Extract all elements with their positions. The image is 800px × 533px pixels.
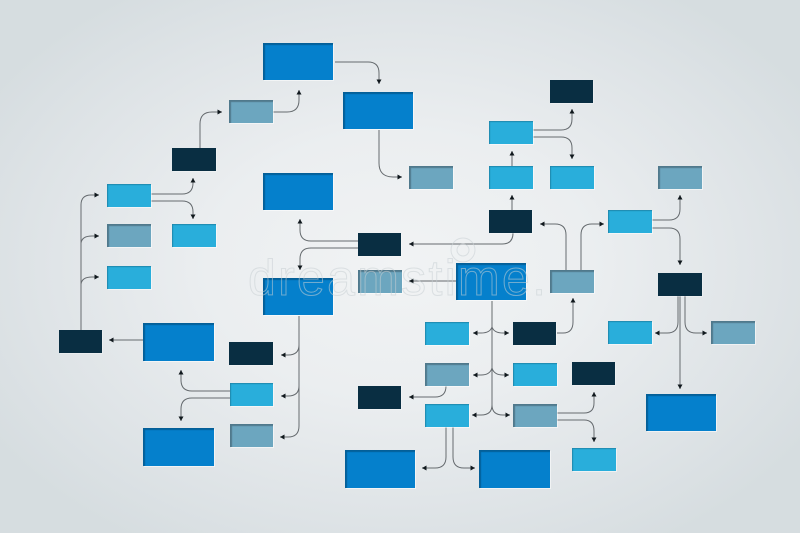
box: cyan mid right second xyxy=(550,166,594,189)
arrow: cyan box down to dark box xyxy=(652,228,680,265)
arrow: muted box down to cyan box xyxy=(557,420,594,442)
box: blue main xyxy=(456,263,526,300)
box: cyan third row left xyxy=(425,404,469,427)
box: muted second row left xyxy=(425,363,469,386)
arrow: muted box up to dark box xyxy=(557,392,594,413)
arrow: muted box to cyan box xyxy=(581,224,604,270)
box: dark first row right xyxy=(513,322,556,345)
arrow: dark box to cyan box xyxy=(655,296,678,333)
box: dark mid right xyxy=(489,210,532,233)
box: blue centre xyxy=(263,278,333,315)
box: cyan second row right xyxy=(513,363,557,386)
arrow: cyan box down to cyan box right xyxy=(533,137,572,159)
box: cyan mid right xyxy=(489,166,533,189)
arrow: trunk to right third row xyxy=(492,405,510,415)
arrow: cyan box up to muted box xyxy=(652,195,680,220)
box: blue bottom right xyxy=(479,450,550,488)
box: muted right xyxy=(658,166,702,189)
arrow: muted box to dark box xyxy=(540,224,566,270)
arrow: trunk to dark box xyxy=(281,345,299,355)
box: muted left second xyxy=(107,224,151,247)
box: dark upper left xyxy=(172,148,216,171)
arrow: cyan box to lower left blue box xyxy=(422,427,446,468)
box: blue top xyxy=(263,43,333,80)
arrow: dark right box to dark centre box xyxy=(409,233,513,244)
arrow: dark centre box down to blue box xyxy=(300,248,358,270)
arrow: left trunk to second box xyxy=(81,236,99,243)
arrow: second box to muted box xyxy=(379,130,402,177)
box: muted beside main xyxy=(550,270,594,293)
box: dark far left xyxy=(59,330,102,353)
box: cyan left first xyxy=(107,184,151,207)
box: muted lower centre xyxy=(230,424,273,447)
arrow: trunk to left second row xyxy=(473,368,492,375)
box: blue upper centre xyxy=(263,173,333,210)
box: muted far right xyxy=(711,321,755,344)
box: cyan lower centre xyxy=(230,383,273,406)
arrow: blue box trunk to muted box xyxy=(280,316,299,437)
arrow: cyan box down to blue box xyxy=(181,398,230,421)
box: dark top right xyxy=(550,80,593,103)
arrow: dark box to muted box xyxy=(685,296,707,333)
arrow: cyan box up to cyan box xyxy=(511,151,513,166)
box: blue far right xyxy=(646,394,716,431)
box: cyan right xyxy=(608,210,652,233)
box: cyan bottom right xyxy=(572,448,616,471)
arrow: muted box to dark lower box xyxy=(409,386,446,397)
box: blue second xyxy=(343,92,413,129)
arrow: blue box to dark far-left box xyxy=(109,339,143,341)
box: blue left xyxy=(143,323,214,361)
arrow: left trunk to first box xyxy=(81,195,99,330)
arrow: trunk to right first row xyxy=(492,327,509,333)
box: dark lower centre xyxy=(229,342,273,365)
arrow: top box to second box xyxy=(335,62,379,84)
box: cyan left target xyxy=(172,224,216,247)
arrow: trunk to cyan box xyxy=(281,386,299,396)
main trunk line xyxy=(491,301,493,405)
arrow: left trunk to third box xyxy=(81,277,99,284)
arrow: dark box to muted box xyxy=(200,112,222,148)
arrow: dark box to blue box xyxy=(679,296,681,389)
box: muted centre xyxy=(358,270,402,293)
box: dark second row far right xyxy=(572,362,615,385)
arrow: dark centre box up to blue box xyxy=(300,219,358,241)
arrow: dark box up to muted box xyxy=(557,298,573,333)
arrow: dark box up to cyan box xyxy=(511,195,513,210)
arrow: cyan box to lower right blue box xyxy=(453,427,475,468)
watermark: dreamstime. xyxy=(248,250,546,306)
box: dark lower xyxy=(358,386,401,409)
arrow: muted box to top box xyxy=(273,90,299,112)
arrow: cyan box up to blue box xyxy=(181,370,230,391)
arrow: trunk to right second row xyxy=(492,368,509,375)
arrow: trunk to left first row xyxy=(473,327,492,333)
arrow: trunk to left third row xyxy=(472,405,492,415)
box: muted third row right xyxy=(513,404,557,427)
box: cyan far right xyxy=(608,321,652,344)
box: blue bottom xyxy=(345,450,415,488)
box: dark centre xyxy=(358,233,401,256)
box: muted upper xyxy=(229,100,273,123)
arrow: cyan box up to dark box xyxy=(151,178,193,194)
arrow: cyan box up to dark top box xyxy=(533,109,572,130)
box: cyan first row left xyxy=(425,322,469,345)
box: blue lower left xyxy=(143,428,214,466)
arrow: main box to muted box xyxy=(409,280,456,282)
box: muted upper centre xyxy=(409,166,453,189)
box: cyan upper right xyxy=(489,121,533,144)
arrow: cyan box down to cyan box xyxy=(151,201,193,219)
box: dark right xyxy=(658,273,702,296)
box: cyan left third xyxy=(107,266,151,289)
